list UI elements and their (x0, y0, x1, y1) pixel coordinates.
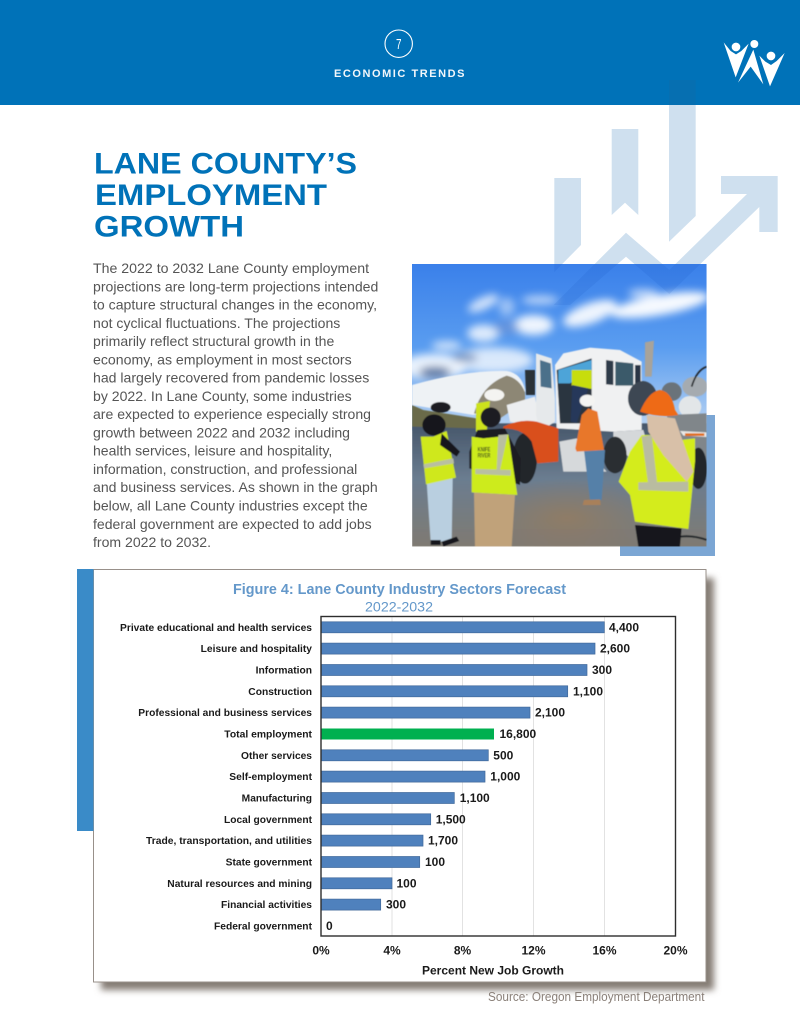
bar chart: Federal government (214, 922, 313, 932)
title: GROWTH (94, 211, 244, 244)
body text (93, 260, 378, 550)
chart subtitle: 2022-2032 (365, 599, 433, 615)
bar chart: 8% (454, 943, 472, 957)
source note: Source: Oregon Employment Department (488, 990, 705, 1004)
x axis title: Percent New Job Growth (422, 964, 564, 978)
body text: health services, leisure and hospitality, (93, 443, 332, 459)
bar chart: 100 (425, 855, 445, 869)
bar chart: 1,100 (460, 791, 490, 805)
body text: to capture structural changes in the economy, (93, 296, 377, 312)
bar chart: Natural resources and mining (167, 879, 312, 890)
bar chart: 500 (493, 748, 514, 762)
bar chart: 16,800 (500, 727, 537, 741)
bar chart: 1,000 (490, 770, 521, 784)
bar chart (120, 616, 688, 978)
photo: trainees in safety vests around a truck: RIVER (478, 452, 490, 459)
body text: projections are long-term projections intended (93, 278, 378, 294)
bar chart: Financial activities (221, 900, 312, 911)
bar chart: 300 (592, 663, 612, 677)
body text: information, construction, and professional (93, 461, 357, 477)
photo backing square (620, 415, 715, 556)
chapter number badge: 7 (396, 37, 402, 53)
body text: below, all Lane County industries except the (93, 498, 368, 514)
body text: from 2022 to 2032. (93, 534, 211, 550)
title (94, 148, 357, 244)
body text: had largely recovered from pandemic losses (93, 370, 369, 386)
body text: growth between 2022 and 2032 including (93, 424, 350, 440)
bar chart: Private educational and health services (120, 623, 312, 634)
blue accent bar (77, 569, 94, 831)
title: LANE COUNTY’S (94, 148, 357, 180)
body text: by 2022. In Lane County, some industries (93, 388, 352, 404)
photo: trainees in safety vests around a truck: KNIFE (478, 447, 491, 454)
body text: The 2022 to 2032 Lane County employment (93, 260, 369, 276)
body text: primarily reflect structural growth in the (93, 333, 335, 349)
bar chart: 2,600 (600, 642, 630, 656)
bar chart: 4% (383, 943, 401, 957)
header band (0, 0, 800, 105)
body text: are expected to experience especially strong (93, 406, 371, 422)
title: EMPLOYMENT (95, 179, 327, 212)
section label: ECONOMIC TRENDS (334, 68, 464, 80)
arrow graphic tint over photo (554, 288, 676, 305)
icon: three figures logo (724, 40, 785, 86)
bar chart: Professional and business services (138, 708, 312, 719)
chart title: Figure 4: Lane County Industry Sectors Forecast (233, 582, 566, 598)
bar chart: 16% (592, 943, 617, 957)
bar chart: 20% (663, 943, 688, 957)
bar chart: 2,100 (535, 706, 565, 720)
bar chart: Construction (248, 687, 312, 698)
bar chart: 0 (326, 919, 333, 933)
bar chart: Leisure and hospitality (201, 644, 312, 655)
bar chart: Trade, transportation, and utilities (146, 836, 312, 847)
bar chart: 12% (521, 943, 546, 957)
bar chart: Information (256, 666, 312, 676)
bar chart: Self-employment (229, 772, 313, 783)
bar chart: 1,500 (436, 812, 466, 826)
chapter number badge (385, 30, 412, 57)
body text: economy, as employment in most sectors (93, 351, 352, 367)
bar chart: Local government (224, 815, 313, 826)
bar chart: 100 (396, 876, 417, 890)
photo: trainees in safety vests around a truck (400, 264, 711, 558)
background growth arrow graphic (554, 80, 778, 305)
bar chart: 1,700 (428, 834, 458, 848)
panel: chart card (94, 570, 706, 982)
body text: not cyclical fluctuations. The projections (93, 315, 340, 331)
chart card shadow (101, 578, 714, 990)
bar chart: Total employment (224, 730, 313, 740)
body text: and business services. As shown in the graph (93, 479, 378, 495)
bar chart: 0% (312, 943, 330, 957)
bar chart: Manufacturing (242, 794, 312, 804)
bar chart: Other services (241, 751, 312, 762)
bar chart: 1,100 (573, 684, 603, 698)
bar chart: 4,400 (609, 620, 639, 634)
bar chart: 300 (386, 898, 406, 912)
body text: federal government are expected to add jobs (93, 516, 372, 532)
bar chart: State government (226, 858, 313, 868)
